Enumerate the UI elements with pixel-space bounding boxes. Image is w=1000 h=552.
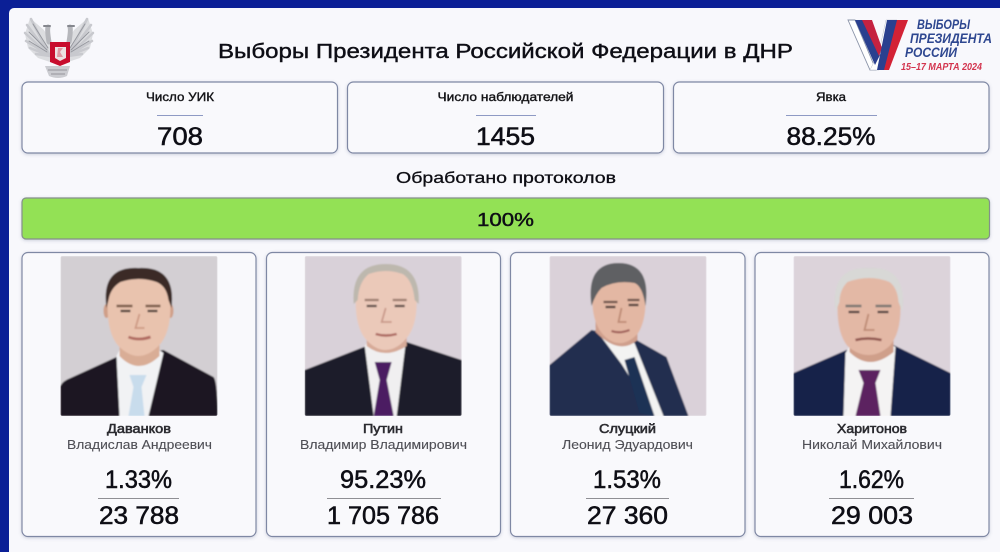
logo mark	[848, 20, 908, 70]
progress heading: Обработано протоколов	[396, 170, 616, 187]
logo text: РОССИИ	[905, 44, 958, 60]
stat card: number of commissions: Число УИК	[146, 90, 214, 104]
candidate card: Slutsky: 1.53%	[593, 466, 661, 494]
candidate card: Kharitonov: Николай Михайлович	[802, 438, 942, 452]
candidate card: Putin: Путин	[363, 422, 403, 436]
portrait: Putin	[305, 256, 462, 416]
candidate card: Davankov: 23 788	[99, 502, 179, 530]
candidate card: Kharitonov: 29 003	[831, 502, 913, 530]
logo text: 15–17 МАРТА 2024	[901, 61, 982, 73]
icon: DNR coat of arms	[25, 18, 93, 78]
candidate card: Davankov: Владислав Андреевич	[67, 438, 212, 452]
candidate card: Kharitonov: 1.62%	[839, 466, 904, 494]
candidate card: Putin: 1 705 786	[327, 502, 439, 530]
candidate card: Slutsky	[510, 252, 745, 536]
stat card: turnout	[674, 82, 989, 153]
stat card: observers	[348, 82, 664, 153]
stat card: turnout: Явка	[816, 90, 846, 104]
candidate card: Putin: 95.23%	[340, 466, 426, 494]
candidate card: Putin	[266, 252, 500, 536]
logo: presidential election 2024	[848, 16, 992, 73]
candidate card: Slutsky: Слуцкий	[599, 422, 656, 436]
logo text	[901, 16, 992, 73]
progress bar	[22, 198, 990, 239]
portrait: Kharitonov	[794, 256, 950, 416]
candidate card: Slutsky: Леонид Эдуардович	[562, 438, 693, 452]
portrait: Slutsky	[550, 256, 706, 416]
stat card: number of commissions	[22, 82, 338, 153]
candidate card: Davankov	[22, 252, 256, 536]
stat card: turnout: 88.25%	[786, 123, 876, 151]
stat card: observers: Число наблюдателей	[438, 90, 574, 104]
candidate card: Kharitonov	[755, 252, 989, 536]
portrait: Davankov	[60, 256, 218, 416]
candidate card: Davankov: Даванков	[107, 422, 171, 436]
logo text: ВЫБОРЫ	[917, 16, 971, 32]
candidate card: Slutsky: 27 360	[587, 502, 668, 530]
candidate card: Putin: Владимир Владимирович	[300, 438, 467, 452]
candidate card: Kharitonov: Харитонов	[837, 422, 907, 436]
progress bar: 100%	[477, 210, 534, 230]
title: Выборы Президента Российской Федерации в ДНР	[218, 40, 793, 63]
candidate card: Davankov: 1.33%	[105, 466, 172, 494]
stat card: number of commissions: 708	[157, 123, 203, 151]
stat card: observers: 1455	[476, 123, 535, 151]
